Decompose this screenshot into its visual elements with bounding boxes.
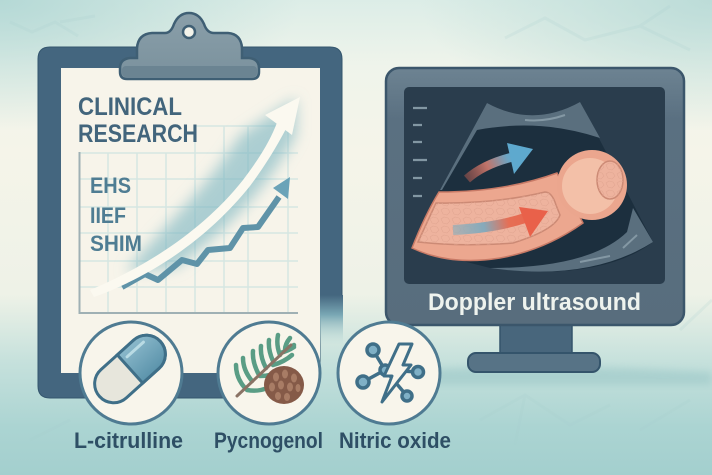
monitor stand — [380, 323, 712, 385]
label: Nitric oxide: Nitric oxide — [339, 428, 451, 453]
white rising arrow — [90, 97, 300, 297]
red flow arrow — [453, 207, 548, 237]
icon: pine cone — [264, 366, 304, 404]
clipboard — [38, 13, 343, 398]
clipboard board — [38, 47, 342, 398]
monitor frame — [386, 68, 684, 325]
ultrasound anatomy — [412, 150, 627, 260]
ultrasound fan — [412, 102, 653, 272]
score labels — [90, 173, 142, 256]
badge: Pycnogenol — [218, 322, 320, 424]
teal trend arrow — [122, 177, 290, 287]
heading: clinical research — [78, 93, 198, 148]
icon: molecule — [357, 344, 424, 401]
board right edge fade — [320, 295, 343, 345]
blue flow arrow — [467, 143, 533, 179]
arrow glow — [125, 98, 296, 272]
monitor caption: Doppler ultrasound — [428, 289, 641, 316]
score labels: EHS — [90, 173, 131, 198]
monitor — [380, 68, 712, 385]
screen — [404, 87, 665, 284]
score labels: IIEF — [90, 203, 126, 228]
heading: clinical research: CLINICAL — [78, 93, 182, 121]
score labels: SHIM — [90, 231, 142, 256]
badge: L-citrulline — [80, 322, 182, 424]
paper sheet — [61, 68, 320, 373]
chart axes — [80, 152, 298, 313]
clip — [120, 13, 259, 79]
icon: lightning bolt — [382, 344, 412, 402]
label: Pycnogenol: Pycnogenol — [214, 428, 323, 453]
depth ticks — [413, 108, 427, 196]
icon: capsule — [87, 327, 173, 411]
label: L-citrulline: L-citrulline — [74, 428, 183, 453]
heading: clinical research: RESEARCH — [78, 120, 198, 148]
chart grid — [79, 126, 298, 313]
icon: pine branch — [236, 335, 294, 396]
badge: Nitric oxide — [338, 322, 440, 424]
